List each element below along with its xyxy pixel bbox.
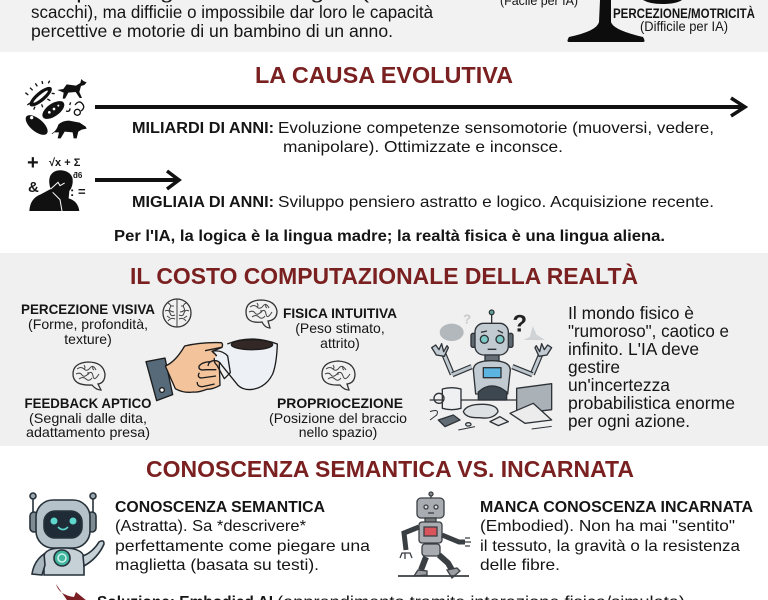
heading: la causa evolutiva: LA CAUSA EVOLUTIVA bbox=[255, 62, 513, 88]
text: noisy physical world: per ogni azione. bbox=[568, 411, 690, 431]
intro text block: percettive e motorie di un bambino di un anno. bbox=[31, 21, 393, 41]
text: semantic knowledge: perfettamente come piegare una bbox=[115, 538, 370, 555]
text: billions of years bbox=[132, 120, 714, 156]
label: propriocezione bbox=[269, 395, 407, 440]
text: noisy physical world bbox=[568, 303, 735, 431]
icon: thinker with math symbols: ƌ6 bbox=[73, 171, 83, 180]
text: noisy physical world: un'incertezza bbox=[568, 375, 670, 395]
label: propriocezione: (Posizione del braccio bbox=[269, 410, 407, 426]
text: missing embodied knowledge: delle fibre. bbox=[480, 557, 560, 574]
icon: brain lower left bbox=[73, 362, 105, 390]
label: propriocezione: PROPRIOCEZIONE bbox=[277, 395, 403, 411]
label: feedback aptico: adattamento presa) bbox=[26, 424, 150, 440]
text: solution embodied AI bbox=[97, 594, 685, 600]
text: thousands of years bbox=[132, 194, 714, 211]
icon: confused robot at messy table: ? bbox=[512, 311, 527, 338]
label: fisica intuitiva bbox=[283, 305, 397, 351]
panel: paradox intro bbox=[31, 0, 755, 42]
icon: thinker with math symbols: : = bbox=[70, 184, 86, 199]
label: percezione visiva: texture) bbox=[64, 331, 112, 347]
label: feedback aptico: FEEDBACK APTICO bbox=[24, 395, 152, 411]
icon: thinker with math symbols: + bbox=[27, 152, 39, 174]
scale label: perception and motor skills: (Difficile per IA) bbox=[640, 19, 728, 34]
text: noisy physical world: gestire bbox=[568, 357, 620, 377]
panel: conoscenza semantica vs incarnata bbox=[30, 456, 753, 600]
label: feedback aptico: (Segnali dalle dita, bbox=[29, 410, 147, 426]
icon: confused robot at messy table: ? bbox=[463, 311, 471, 326]
icon: confused robot at messy table bbox=[430, 310, 552, 430]
icon: thinker with math symbols bbox=[27, 152, 86, 211]
icon: thinker with math symbols: & bbox=[28, 179, 39, 196]
text: semantic knowledge bbox=[115, 499, 370, 574]
icon: hand holding coffee cup bbox=[146, 339, 277, 401]
icon: brain upper right bbox=[246, 300, 277, 328]
text: missing embodied knowledge: MANCA CONOSCENZA INCARNATA bbox=[480, 499, 753, 516]
label: fisica intuitiva: (Peso stimato, bbox=[295, 320, 385, 336]
label: fisica intuitiva: FISICA INTUITIVA bbox=[283, 305, 397, 321]
icon: thinker with math symbols: √x + Σ bbox=[49, 157, 81, 169]
text: billions of years: Evoluzione competenze sensomotorie (muoversi, vedere, bbox=[278, 120, 714, 137]
callout: logic as mother tongue: Per l'IA, la logica è la lingua madre; la realtà fisica è una lingua aliena. bbox=[114, 228, 665, 245]
label: percezione visiva bbox=[21, 301, 155, 347]
text: semantic knowledge: maglietta (basata su testi). bbox=[115, 557, 319, 574]
text: billions of years: MILIARDI DI ANNI: bbox=[132, 120, 274, 137]
intro text block bbox=[31, 0, 433, 41]
label: percezione visiva: PERCEZIONE VISIVA bbox=[21, 301, 155, 317]
text: semantic knowledge: CONOSCENZA SEMANTICA bbox=[115, 499, 325, 516]
icon: friendly robot bbox=[30, 493, 104, 575]
text: thousands of years: Sviluppo pensiero astratto e logico. Acquisizione recente. bbox=[278, 194, 714, 211]
icon: brain top view bbox=[163, 299, 191, 327]
icon: balance scale base bbox=[568, 0, 682, 42]
label: feedback aptico bbox=[24, 395, 152, 440]
text: noisy physical world: probabilistica enorme bbox=[568, 393, 735, 413]
arrow: billions of years bbox=[95, 98, 745, 116]
icon: brain lower right bbox=[322, 361, 355, 390]
text: missing embodied knowledge: il tessuto, la gravità o la resistenza bbox=[480, 538, 740, 555]
text: semantic knowledge: (Astratta). Sa *descrivere* bbox=[115, 518, 306, 535]
text: noisy physical world: "rumoroso", caotico e bbox=[568, 321, 729, 341]
intro text block: scacchi), ma difficiie o impossibile dar loro le capacità bbox=[31, 2, 433, 22]
heading: conoscenza semantica vs incarnata: CONOSCENZA SEMANTICA VS. INCARNATA bbox=[146, 456, 634, 482]
panel: il costo computazionale della realtà bbox=[21, 262, 735, 440]
icon: walking robot bbox=[398, 492, 471, 578]
text: noisy physical world: infinito. L'IA deve bbox=[568, 339, 699, 359]
panel: la causa evolutiva bbox=[22, 62, 745, 245]
text: missing embodied knowledge: (Embodied). Non ha mai "sentito" bbox=[480, 518, 735, 535]
arrow: thousands of years bbox=[95, 171, 179, 189]
icon: microbes and animals bbox=[22, 79, 87, 138]
label: fisica intuitiva: attrito) bbox=[320, 335, 360, 351]
text: missing embodied knowledge bbox=[480, 499, 753, 574]
arrow: toward solution bbox=[56, 584, 87, 600]
text: thousands of years: MIGLIAIA DI ANNI: bbox=[132, 194, 274, 211]
label: propriocezione: nello spazio) bbox=[299, 424, 377, 440]
heading: costo computazionale: IL COSTO COMPUTAZIONALE DELLA REALTÀ bbox=[130, 262, 638, 289]
text: noisy physical world: Il mondo fisico è bbox=[568, 303, 694, 323]
label: percezione visiva: (Forme, profondità, bbox=[28, 316, 148, 332]
scale label: perception and motor skills bbox=[613, 6, 755, 34]
text: billions of years: manipolare). Ottimizzate e inconsce. bbox=[283, 139, 563, 156]
